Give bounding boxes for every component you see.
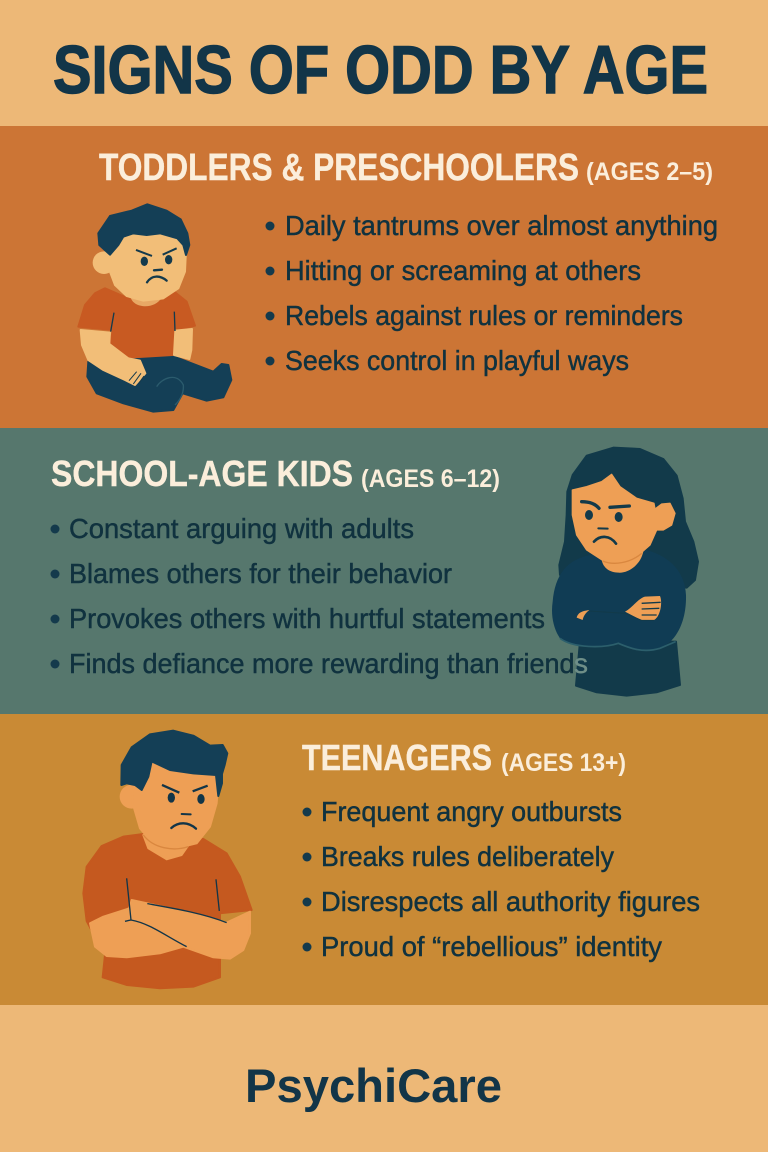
list: toddler signs: Seeks control in playful ways bbox=[285, 345, 629, 376]
panel: footer bbox=[0, 1005, 768, 1152]
heading: school-age: SCHOOL-AGE KIDS bbox=[51, 453, 353, 494]
logo text: PsychiCare bbox=[245, 1059, 502, 1112]
list: teen signs bbox=[302, 796, 700, 962]
list: school-age signs: Provokes others with hurtful statements bbox=[69, 603, 545, 634]
heading: teenagers: TEENAGERS bbox=[302, 737, 492, 778]
list: teen signs: Proud of “rebellious” identity bbox=[321, 931, 662, 962]
heading: teenagers bbox=[302, 737, 626, 778]
list: school-age signs bbox=[50, 513, 588, 679]
list: teen signs: Breaks rules deliberately bbox=[321, 841, 614, 872]
heading: school-age: (AGES 6–12) bbox=[361, 465, 500, 493]
panel: school-age kids bbox=[0, 428, 768, 714]
illustration: angry toddler sitting bbox=[78, 204, 231, 412]
heading: toddlers: TODDLERS & PRESCHOOLERS bbox=[99, 147, 579, 189]
faded letter over illustration: s bbox=[574, 648, 588, 679]
list: school-age signs: Finds defiance more rewarding than friends bbox=[69, 648, 588, 679]
list: toddler signs: Daily tantrums over almost anything bbox=[285, 210, 718, 241]
list: teen signs: Disrespects all authority figures bbox=[321, 886, 700, 917]
list: school-age signs: Constant arguing with adults bbox=[69, 513, 414, 544]
list: toddler signs: Rebels against rules or reminders bbox=[285, 300, 683, 331]
panel: header bbox=[0, 0, 768, 126]
illustration: angry girl with crossed arms bbox=[552, 448, 698, 696]
list: toddler signs: Hitting or screaming at others bbox=[285, 255, 641, 286]
heading: teenagers: (AGES 13+) bbox=[501, 749, 626, 777]
heading: toddlers: (AGES 2–5) bbox=[586, 158, 713, 186]
list: school-age signs: Blames others for their behavior bbox=[69, 558, 452, 589]
list: teen signs: Frequent angry outbursts bbox=[321, 796, 622, 827]
panel: toddlers and preschoolers bbox=[0, 126, 768, 428]
panel: teenagers bbox=[0, 714, 768, 1005]
list: toddler signs bbox=[266, 210, 718, 376]
illustration: angry teen with crossed arms bbox=[83, 731, 252, 988]
